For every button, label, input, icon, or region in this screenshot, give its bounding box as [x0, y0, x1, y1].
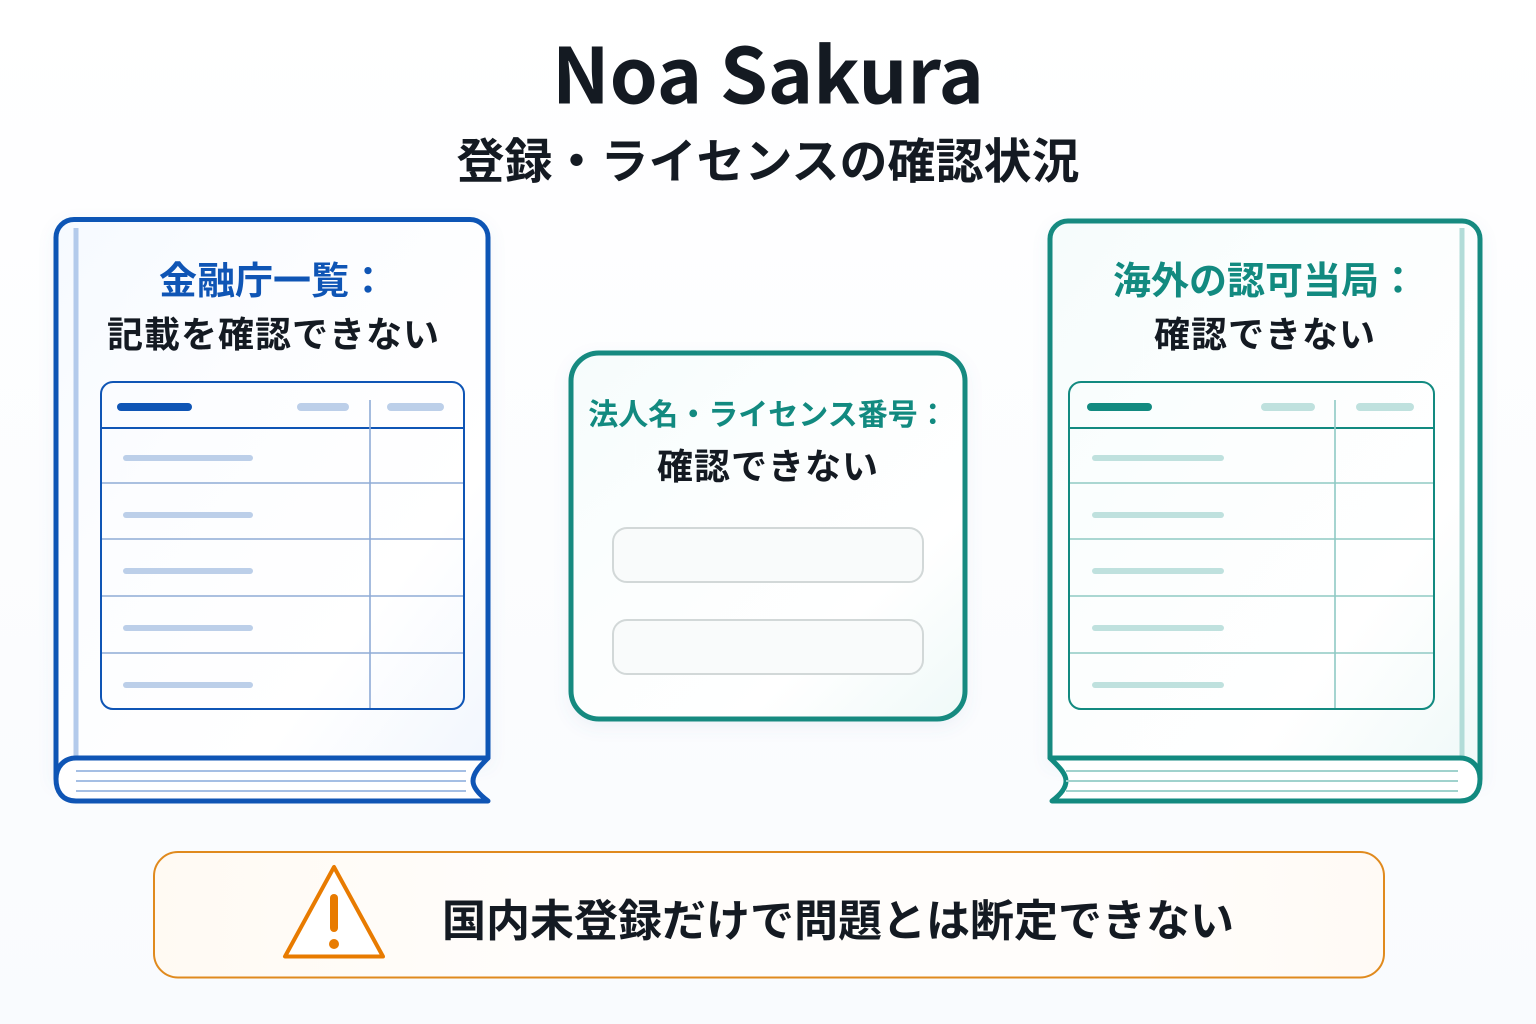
- panel: right book, overseas authorities: [1050, 221, 1480, 801]
- empty field: license: [613, 620, 923, 674]
- panel: center card, corporate name and license number: [571, 353, 965, 719]
- status text: 確認できない: [1154, 306, 1376, 358]
- book cover: [56, 220, 488, 778]
- empty field: name: [613, 528, 923, 582]
- warning text: 国内未登録だけで問題とは断定できない: [442, 885, 1234, 949]
- callout: warning banner: [154, 852, 1384, 978]
- book spine strip: [74, 228, 78, 756]
- heading: 法人名・ライセンス番号：: [588, 390, 948, 434]
- book pages base: [1050, 758, 1480, 801]
- book pages base: [56, 758, 488, 801]
- icon: warning triangle: [285, 867, 383, 956]
- heading: 金融庁一覧：: [159, 250, 387, 305]
- card: [571, 353, 965, 719]
- subtitle: 登録・ライセンスの確認状況: [456, 122, 1080, 192]
- status text: 確認できない: [657, 438, 879, 490]
- register table: [101, 382, 464, 709]
- banner box: [154, 852, 1384, 978]
- status text: 記載を確認できない: [107, 306, 440, 358]
- panel: left book, FSA list: [56, 220, 488, 801]
- book cover: [1050, 221, 1480, 778]
- register table: [1069, 382, 1434, 709]
- title: Noa Sakura: [552, 16, 984, 126]
- book spine strip: [1460, 228, 1464, 756]
- heading: 海外の認可当局：: [1113, 250, 1417, 305]
